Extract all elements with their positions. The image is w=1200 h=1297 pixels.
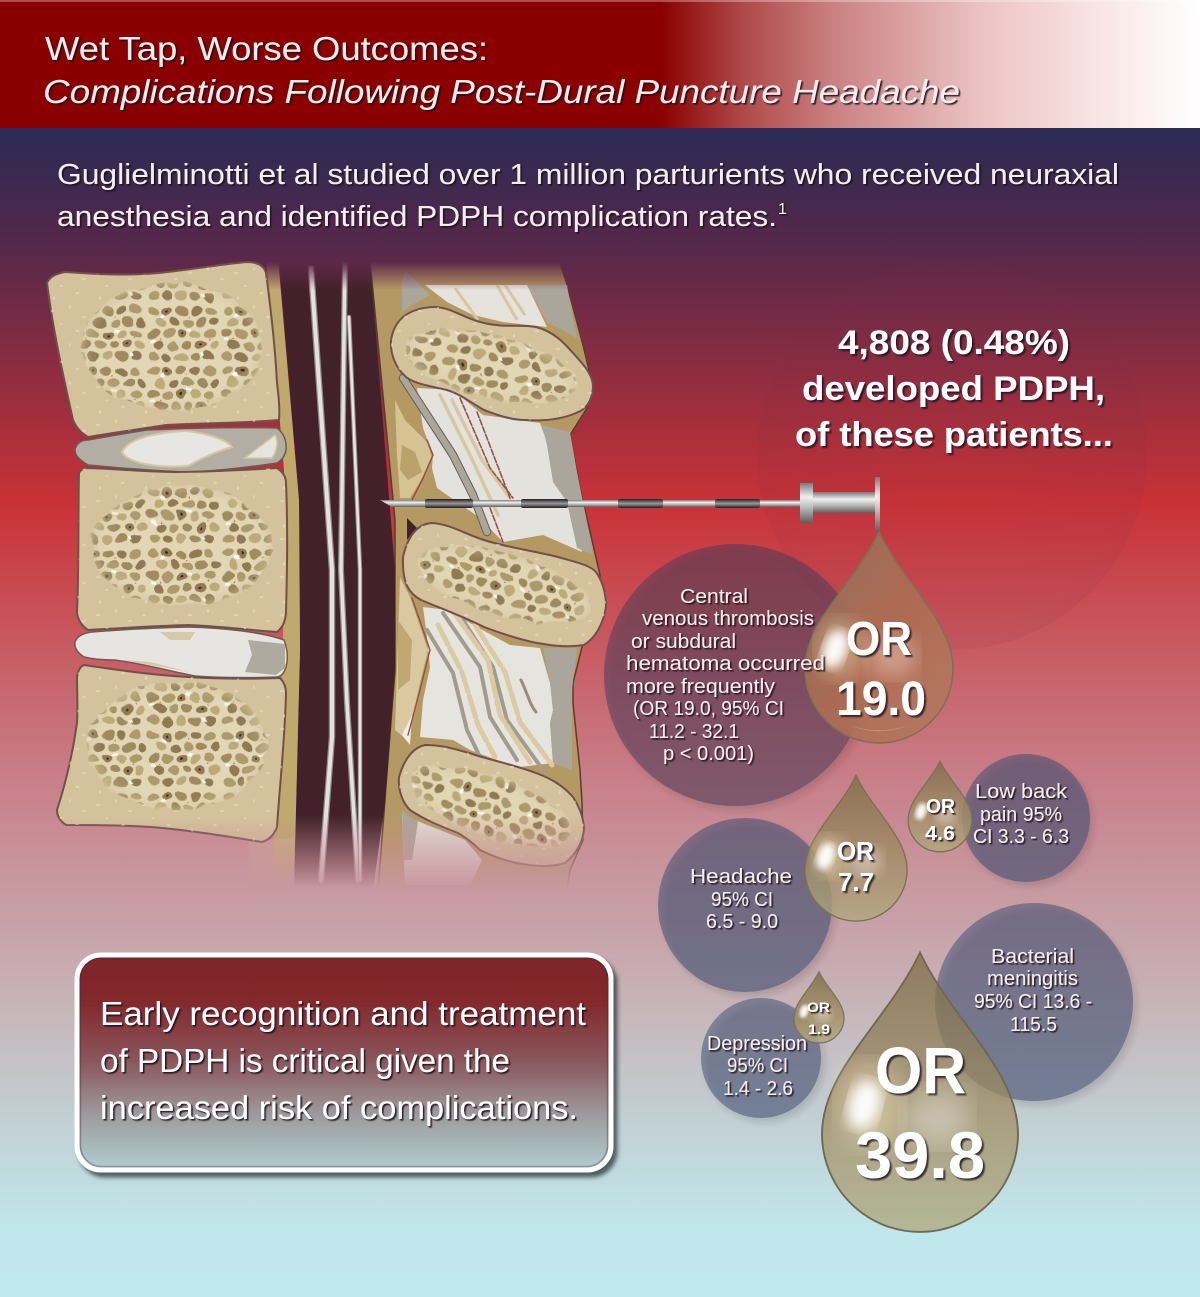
callout: 4,808 developed PDPH: 4,808 (0.48%) [838, 324, 1070, 362]
spinal canal [278, 250, 395, 890]
vertebra 2 [77, 468, 287, 632]
circle: bacterial meningitis [935, 903, 1133, 1101]
posterior soft tissue [369, 250, 603, 890]
intro text: Guglielminotti et al studied over 1 million parturients who received neuraxial [57, 159, 1119, 191]
posterior vertebra C [399, 745, 584, 866]
spine illustration [47, 250, 606, 890]
middle ligament white [417, 388, 582, 552]
label: OR 39.8: OR [875, 1033, 966, 1107]
drop OR 39.8 [822, 953, 1018, 1232]
posterior vertebra A [391, 307, 593, 420]
upper ligament [425, 285, 547, 327]
circle: depression [701, 998, 821, 1118]
needle hub [800, 483, 813, 523]
callout text: Early recognition and treatment [100, 995, 586, 1032]
label: OR 4.6 [925, 796, 956, 845]
drop OR 4.6 [908, 761, 972, 852]
title [43, 30, 960, 110]
text: headache: Headache [690, 866, 792, 888]
spinal needle [380, 477, 880, 532]
label: OR 19.0 [836, 613, 926, 726]
text: bacterial meningitis: meningitis [987, 968, 1078, 990]
nerve roots [311, 258, 360, 880]
intervertebral disc lower [75, 627, 287, 678]
below vertebra C [402, 815, 482, 885]
large background circle [757, 260, 1147, 650]
text: depression: Depression [707, 1033, 807, 1055]
intro text: anesthesia and identified PDPH complication rates. [57, 201, 777, 233]
vertebra 3 [56, 664, 294, 849]
text: low back pain [973, 781, 1069, 848]
label: OR 39.8 [855, 1033, 985, 1192]
drop OR 1.9 [794, 972, 844, 1043]
needle shaft [380, 500, 800, 507]
title: Wet Tap, Worse Outcomes: [45, 30, 488, 67]
tan band left of canal [266, 258, 300, 880]
text: central venous thrombosis: 11.2 - 32.1 [649, 721, 739, 743]
text: bacterial meningitis: Bacterial [991, 946, 1074, 968]
callout: 4,808 developed PDPH: of these patients... [795, 416, 1113, 454]
callout text [100, 995, 586, 1126]
callout text: increased risk of complications. [100, 1089, 578, 1126]
callout text: of PDPH is critical given the [100, 1042, 510, 1079]
text: headache: 6.5 - 9.0 [706, 911, 778, 933]
label: OR 1.9: 1.9 [808, 1021, 830, 1037]
circle: headache [658, 818, 832, 992]
drop OR 19.0 [805, 532, 953, 743]
ligament fibres [403, 378, 552, 770]
label: OR 39.8: 39.8 [855, 1118, 985, 1192]
drop OR 7.7 [805, 775, 907, 921]
lower ligament white [420, 607, 553, 767]
intro text [57, 159, 1119, 233]
text: bacterial meningitis: 115.5 [1010, 1014, 1057, 1036]
label: OR 19.0: 19.0 [836, 673, 926, 726]
text: depression [707, 1033, 807, 1100]
middle ligament left tan [395, 400, 432, 498]
text: central venous thrombosis: or subdural [631, 631, 736, 653]
text: bacterial meningitis [974, 946, 1092, 1036]
label: OR 1.9 [807, 999, 830, 1037]
label: OR 7.7: OR [837, 836, 874, 866]
text: central venous thrombosis: more frequently [626, 676, 775, 698]
callout: 4,808 developed PDPH: developed PDPH, [802, 370, 1105, 408]
text: depression: 95% CI [727, 1055, 788, 1077]
ligaments [395, 270, 593, 885]
text: headache: 95% CI [711, 889, 773, 911]
callout: 4,808 developed PDPH [795, 324, 1113, 454]
label: OR 4.6: OR [926, 796, 956, 818]
text: low back pain: CI 3.3 - 6.3 [973, 826, 1069, 848]
text: bacterial meningitis: 95% CI 13.6 - [974, 991, 1092, 1013]
lower ligament gray right [543, 648, 577, 770]
text: central venous thrombosis [626, 586, 825, 765]
text: headache [690, 866, 792, 933]
intro text: 1 [778, 201, 787, 218]
label: OR 7.7 [837, 836, 874, 897]
label: OR 1.9: OR [807, 999, 830, 1015]
text: central venous thrombosis: Central [680, 586, 748, 608]
middle ligament gray right [542, 425, 593, 555]
posterior spine, canal and ligaments [266, 250, 606, 890]
intervertebral disc upper [75, 428, 286, 472]
circle: central venous thrombosis [604, 544, 866, 806]
text: low back pain: pain 95% [980, 804, 1062, 826]
label: OR 4.6: 4.6 [925, 823, 955, 845]
text: central venous thrombosis: p < 0.001) [663, 743, 754, 765]
callout box: early recognition [77, 955, 611, 1170]
text: central venous thrombosis: (OR 19.0, 95% CI [633, 698, 784, 720]
posterior vertebra B [403, 523, 606, 646]
dark gap under needle [407, 518, 417, 540]
header banner [0, 0, 1200, 128]
label: OR 19.0: OR [846, 613, 912, 666]
text: central venous thrombosis: hematoma occurred [626, 653, 825, 675]
label: OR 7.7: 7.7 [838, 867, 874, 897]
lower left tan zone [395, 577, 428, 740]
circle: low back pain [962, 754, 1090, 882]
text: central venous thrombosis: venous thrombosis [642, 608, 814, 630]
text: depression: 1.4 - 2.6 [723, 1078, 793, 1100]
vertebra 1 [47, 262, 279, 437]
text: low back pain: Low back [975, 781, 1068, 803]
title: Complications Following Post-Dural Puncture Headache [43, 73, 960, 110]
